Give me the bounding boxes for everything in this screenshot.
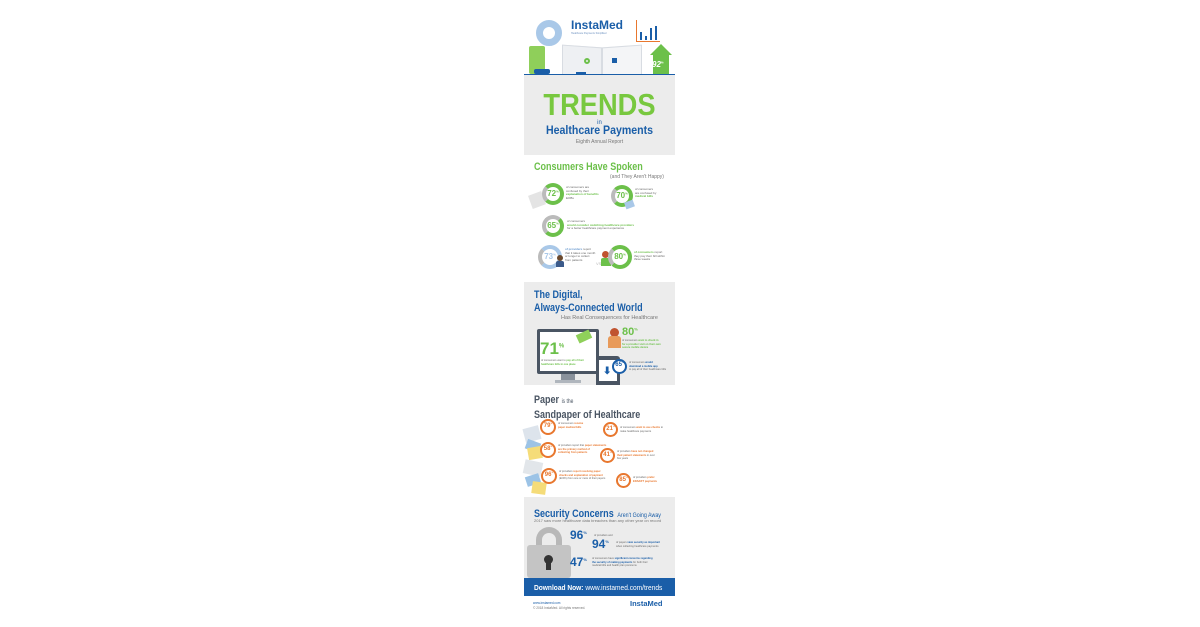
stat: 80% consumers <box>601 245 665 269</box>
icon: padlock <box>527 527 571 578</box>
subheading: (and They Aren't Happy) <box>610 174 664 180</box>
stat: 85% <box>616 473 657 488</box>
stat: 65% <box>542 215 634 237</box>
stat: 65%: 65% <box>547 221 559 230</box>
stat: 80% consumers: 80% <box>614 252 626 261</box>
stat: 80% mobile: secure mobile device <box>622 346 648 349</box>
heading <box>534 394 640 421</box>
stat: 94% <box>592 537 660 551</box>
illustration: phone <box>596 356 620 388</box>
stat: 21% <box>603 422 663 437</box>
stat: 79% <box>540 419 584 435</box>
stat: 72%: 72% <box>547 189 559 198</box>
stat: 73% providers: 73% <box>544 252 556 261</box>
stat: 58%: of providers report that paper statements <box>558 444 606 447</box>
stat: 65% app: download a mobile app <box>629 365 658 368</box>
stat: 21%: make healthcare payments <box>620 430 651 433</box>
stat: 79%: 79% <box>544 423 552 429</box>
stat: 65% app: to pay all of their healthcare bills <box>629 368 666 371</box>
stat: 58%: collecting from patients <box>558 451 587 454</box>
stat: 96% <box>541 468 606 484</box>
stat: 65%: of consumers <box>567 219 585 223</box>
stat: 72%: of consumers are <box>566 185 589 189</box>
icon: green arrow with 92% <box>650 44 672 74</box>
stat: 72% <box>528 183 599 209</box>
icon: green money bag <box>529 46 545 74</box>
illustration: paper piles <box>522 425 547 495</box>
stat: 94%: 94% <box>592 537 609 551</box>
panel: paper is the sandpaper of healthcare <box>524 385 675 497</box>
icon: blue donut <box>536 20 562 46</box>
footer text: www.instamed.com <box>533 601 560 605</box>
stat: 58%: are the primary method of <box>558 448 590 451</box>
heading <box>534 289 643 314</box>
stat: 96%: 96% <box>545 472 553 478</box>
stat: 65% app: of consumers would <box>629 361 653 364</box>
stat: 73% providers <box>538 245 596 269</box>
stat: 41%: of providers have not changed <box>617 450 653 453</box>
stat: 65% app <box>612 359 666 374</box>
stat: 85%: of providers prefer <box>633 476 655 479</box>
banner: download now <box>524 578 675 596</box>
subtitle: in Healthcare Payments: Healthcare Payments <box>546 125 653 137</box>
stat: 41% <box>600 448 655 463</box>
stat: 96%: of providers report receiving paper <box>559 470 601 473</box>
heading: The Digital, <box>534 289 583 301</box>
illustration: monitor with 71%: of consumers want to pay all of their <box>541 359 584 362</box>
subtitle: in Healthcare Payments: in <box>597 120 602 126</box>
stat: 70%: medical bills <box>635 194 653 198</box>
stat: 47%: medical bills and health plan premiums <box>592 564 637 567</box>
illustration: monitor with 71% <box>537 329 599 383</box>
panel: digital always-connected world <box>524 282 675 385</box>
stat: 80% mobile <box>608 326 661 349</box>
stat: 80% consumers: they pay their bill within <box>634 254 665 258</box>
logo: InstaMed footer: InstaMed <box>630 599 663 608</box>
icon: green arrow with 92%: 92% <box>652 60 664 69</box>
header: top illustration area <box>529 18 672 74</box>
stat: 70% <box>611 185 656 210</box>
stat: 79%: of consumers receive <box>558 422 583 425</box>
stat: 65% app: 65% <box>615 362 624 368</box>
logo: InstaMed: InstaMed <box>571 18 623 32</box>
stat: 79%: paper medical bills <box>558 426 581 429</box>
heading: Sandpaper of Healthcare <box>534 409 640 421</box>
stat: 85%: ERA/EFT payments <box>633 480 657 483</box>
footer text <box>533 601 585 610</box>
stat: 58% <box>540 442 606 458</box>
stat: 80% mobile: 80% <box>622 326 638 338</box>
stat: 73% providers: of providers report <box>565 247 591 251</box>
illustration: monitor with 71%: healthcare bills in one place <box>541 363 576 366</box>
panel: consumers have spoken <box>524 155 675 282</box>
stat: 96%: (EOPs) from one or more of their payers <box>559 477 605 480</box>
stat: 47% <box>570 555 653 569</box>
illustration: monitor with 71%: 71% <box>540 339 564 358</box>
stat: 73% providers: that it takes one month <box>565 251 595 255</box>
stat: 96% <box>570 528 613 542</box>
stat: 47%: the security of making payments for both their <box>592 561 648 564</box>
subheading: 2017 saw more healthcare data breaches than any other year on record <box>534 518 661 523</box>
stat: 21%: 21% <box>606 426 615 432</box>
stat: 65%: for a better healthcare payment experience <box>567 226 624 230</box>
stat: 70%: 70% <box>616 191 628 200</box>
stat: 80% mobile: for a provider visit on their own <box>622 343 661 346</box>
subtitle: in Healthcare Payments <box>546 120 653 137</box>
footer <box>524 596 675 616</box>
divider line <box>524 74 675 75</box>
icon: blue cars <box>534 69 550 74</box>
stat: 65%: would consider switching healthcare providers <box>567 223 634 227</box>
stat: 80% mobile: of consumers want to check in <box>622 339 658 342</box>
stat: 96%: 96% <box>570 528 587 542</box>
stat: 58%: 58% <box>544 446 552 452</box>
stat: 41%: their patient statements in over <box>617 454 655 457</box>
panel: security concerns <box>524 497 675 578</box>
heading: Paper is the <box>534 394 573 406</box>
heading: Consumers Have Spoken: Consumers Have Spoken <box>534 161 643 173</box>
panel: title <box>524 75 675 155</box>
illustration: phone: ⬇ <box>603 366 611 377</box>
stat: 21%: of consumers want to use checks to <box>620 426 663 429</box>
stat: 72%: explanation of benefits <box>566 192 599 196</box>
stat: 72%: EOBs <box>566 196 574 200</box>
stat: 94%: of payers view security as important <box>616 541 660 544</box>
stat: 80% consumers: three weeks <box>634 257 650 261</box>
banner: download now: Download Now: www.instamed.com/trends <box>534 583 662 592</box>
stat: 73% providers: or longer to collect <box>565 254 590 258</box>
stat: 47%: 47% <box>570 555 587 569</box>
heading: Always-Connected World <box>534 302 643 314</box>
stat: 85%: 85% <box>619 477 628 483</box>
stat: 70%: are confused by <box>635 191 656 195</box>
stat: 70%: of consumers <box>635 187 653 191</box>
illustration: open magazine <box>562 44 642 74</box>
stat: 96%: of providers and <box>594 534 613 537</box>
stat: 80% consumers: of consumers report <box>634 250 662 254</box>
stat: 41%: five years <box>617 457 628 460</box>
subheading: Has Real Consequences for Healthcare <box>561 315 658 321</box>
stat: 96%: checks and explanation of payment <box>559 474 603 477</box>
header: top illustration area: Healthcare Payments Simplified <box>571 32 606 35</box>
text: Eighth Annual Report: Eighth Annual Report <box>576 139 623 145</box>
heading: Security Concerns Aren't Going Away <box>534 508 661 520</box>
stat: 41%: 41% <box>603 452 612 458</box>
stat: 94%: when collecting healthcare payments <box>616 545 659 548</box>
title: TRENDS: TRENDS <box>543 87 656 122</box>
stat: 72%: confused by their <box>566 189 589 193</box>
text: vs: VS <box>596 261 601 266</box>
stat: 73% providers: from patients <box>565 258 582 262</box>
icon: bar chart <box>636 20 660 42</box>
footer text: © 2018 InstaMed. All rights reserved. <box>533 606 585 610</box>
stat: 47%: of consumers have significant concerns regarding <box>592 557 653 560</box>
